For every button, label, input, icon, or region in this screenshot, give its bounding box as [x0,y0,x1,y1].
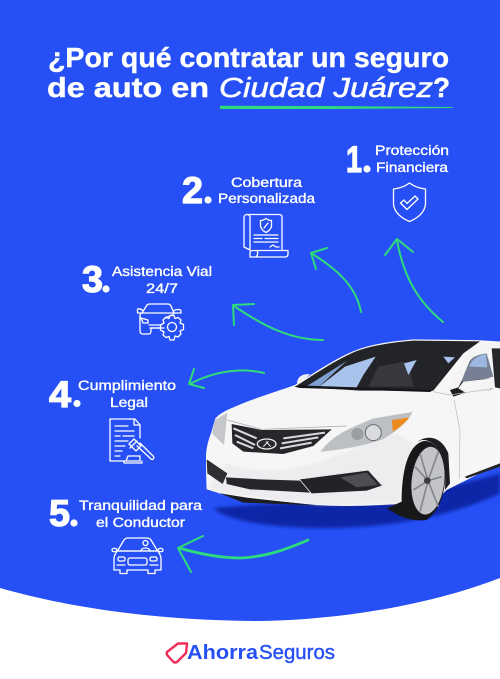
car body [206,339,500,506]
label 5: Tranquilidad para [79,498,203,513]
label 3: 24/7 [146,281,178,296]
icon: shield with check [394,183,426,222]
car shadow [213,473,500,528]
side mirror [450,378,493,397]
label 5 [79,498,203,530]
arrow to item 3 [233,304,323,340]
item 3: Asistencia Vial 24/7 [82,259,212,340]
arrow to item 1 [385,239,443,322]
label 2: Personalizada [218,191,316,206]
icon: car with driver [112,538,163,574]
logo wordmark [187,642,335,664]
side window [459,353,493,386]
left headlight [212,413,227,445]
item 1: Protección Financiera [346,139,449,222]
logo: AhorraSeguros [167,642,335,664]
hood crease [227,420,347,429]
icon: document with gavel [110,419,154,463]
label 3 [112,264,212,296]
label 1: Protección [375,143,449,158]
number 1: 1 [346,139,362,180]
label 3: Asistencia Vial [112,264,212,279]
windshield glass [318,357,376,387]
title [47,42,450,103]
logo wordmark: Ahorra [187,642,259,664]
title: ? [433,72,450,103]
title: Ciudad Juárez [219,72,433,103]
grille [232,424,332,454]
hyundai badge [257,439,276,449]
label 5: el Conductor [96,515,186,530]
label 4 [78,378,176,410]
title underline [220,106,453,109]
bumper underside [220,493,317,505]
icon: policy document [244,214,288,257]
title: ¿Por qué contratar un seguro [48,42,449,73]
item 4: Cumplimiento Legal [49,374,176,463]
title: de auto en [47,72,209,103]
interior seats [368,362,413,387]
icon: car with gear [138,304,184,340]
arrow to item 5 [178,536,308,572]
car photo illustration [206,339,500,528]
label 4: Legal [110,395,148,410]
arrow to item 4 [189,369,264,388]
label 2: Cobertura [231,175,303,190]
label 1: Financiera [376,160,449,175]
number 5: 5 [49,493,70,534]
far mirror [297,374,310,383]
icon: price tag [167,644,187,663]
number 4: 4 [49,374,71,415]
lower intake [226,477,310,493]
item 5: Tranquilidad para el Conductor [49,493,203,574]
windshield base [294,385,433,392]
main headlight [320,412,413,452]
number 2: 2 [182,170,203,211]
logo wordmark: Seguros [259,642,335,664]
item 2: Cobertura Personalizada [182,170,316,257]
front wheel [387,441,448,520]
label 2 [218,175,316,206]
label 1 [375,143,449,175]
arrow to item 2 [311,248,361,312]
front fascia shading [208,433,413,505]
label 4: Cumplimiento [78,378,176,393]
white roof rail [445,341,500,397]
number 3: 3 [82,259,103,300]
roof and windshield frame [295,341,480,391]
turn signal [392,417,409,432]
door seam and sill [433,388,493,478]
wheel arch [413,438,450,490]
